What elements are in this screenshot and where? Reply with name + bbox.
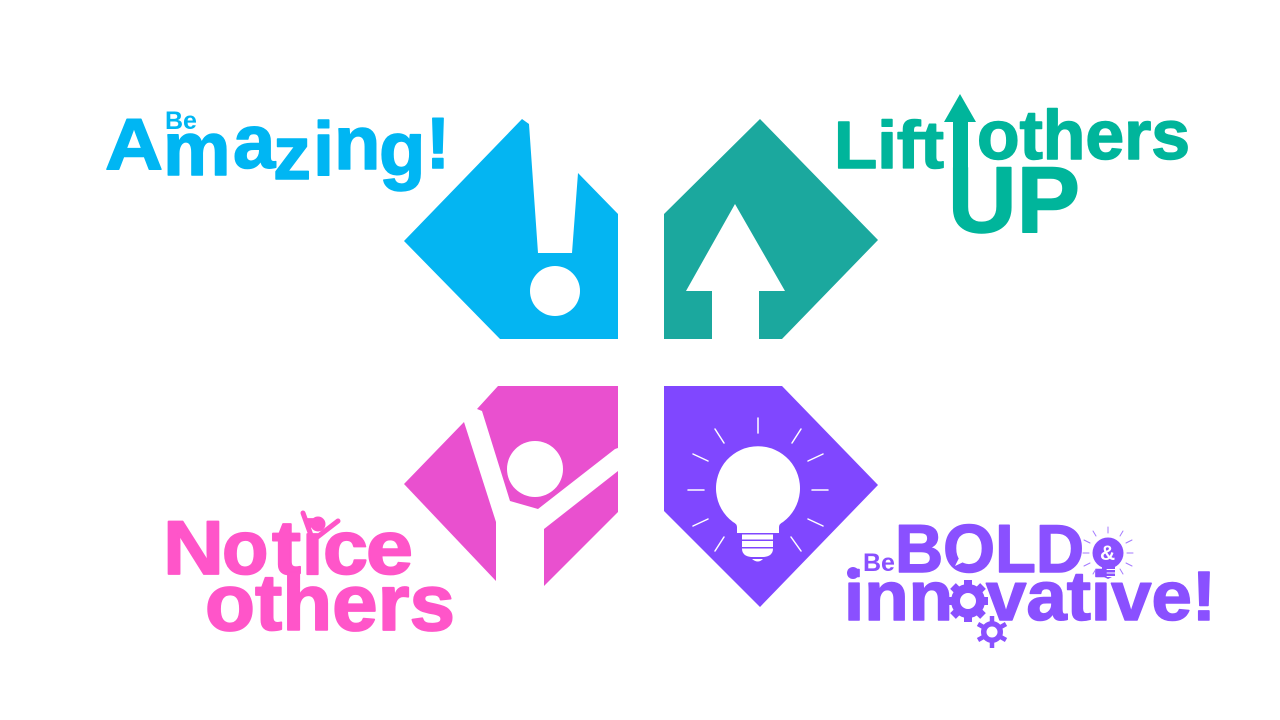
heading: be amazing: Be [165,107,197,135]
heading: notice others: i [302,506,323,591]
heading: lift others up [834,94,1190,252]
heading: be bold and innovative: BOLD [895,511,1084,587]
heading: be bold and innovative: Be [863,549,895,577]
heading: be amazing: m [163,107,231,192]
heading: be amazing: z [273,111,311,196]
heading: notice others: t [272,506,301,591]
icon: small lightbulb with ampersand [1083,527,1133,579]
heading: notice others: N [163,506,224,591]
panel: be bold lightbulb icon [664,386,878,607]
heading: be bold and innovative [844,511,1216,648]
heading: be amazing: A [105,105,163,185]
heading: lift others up: Lift [834,108,944,183]
heading: notice others: c [323,506,368,591]
panel: be amazing exclamation icon [404,119,618,339]
icon: large gear [948,580,988,622]
icon: small lightbulb with ampersand: & [1100,542,1115,565]
heading: be amazing [105,100,450,196]
heading: be amazing: ! [426,104,450,184]
heading: notice others [163,506,455,647]
heading: be bold and innovative: vative! [986,557,1216,635]
panel: lift others up arrow icon [664,119,878,339]
heading: be amazing: a [233,100,276,185]
panel: notice others person icon [404,386,618,586]
heading: be amazing: i [313,107,334,192]
heading: be amazing: g [379,107,425,192]
heading: notice others: o [222,506,268,591]
heading: notice others: e [366,506,413,591]
heading: lift others up: others [977,96,1190,174]
heading: lift others up: UP [948,147,1080,252]
icon: small gear [978,616,1006,648]
heading: be bold and innovative: o [953,569,984,625]
heading: notice others: others [205,558,455,647]
heading: be amazing: n [334,101,380,186]
heading: be bold and innovative: inn [844,557,953,635]
